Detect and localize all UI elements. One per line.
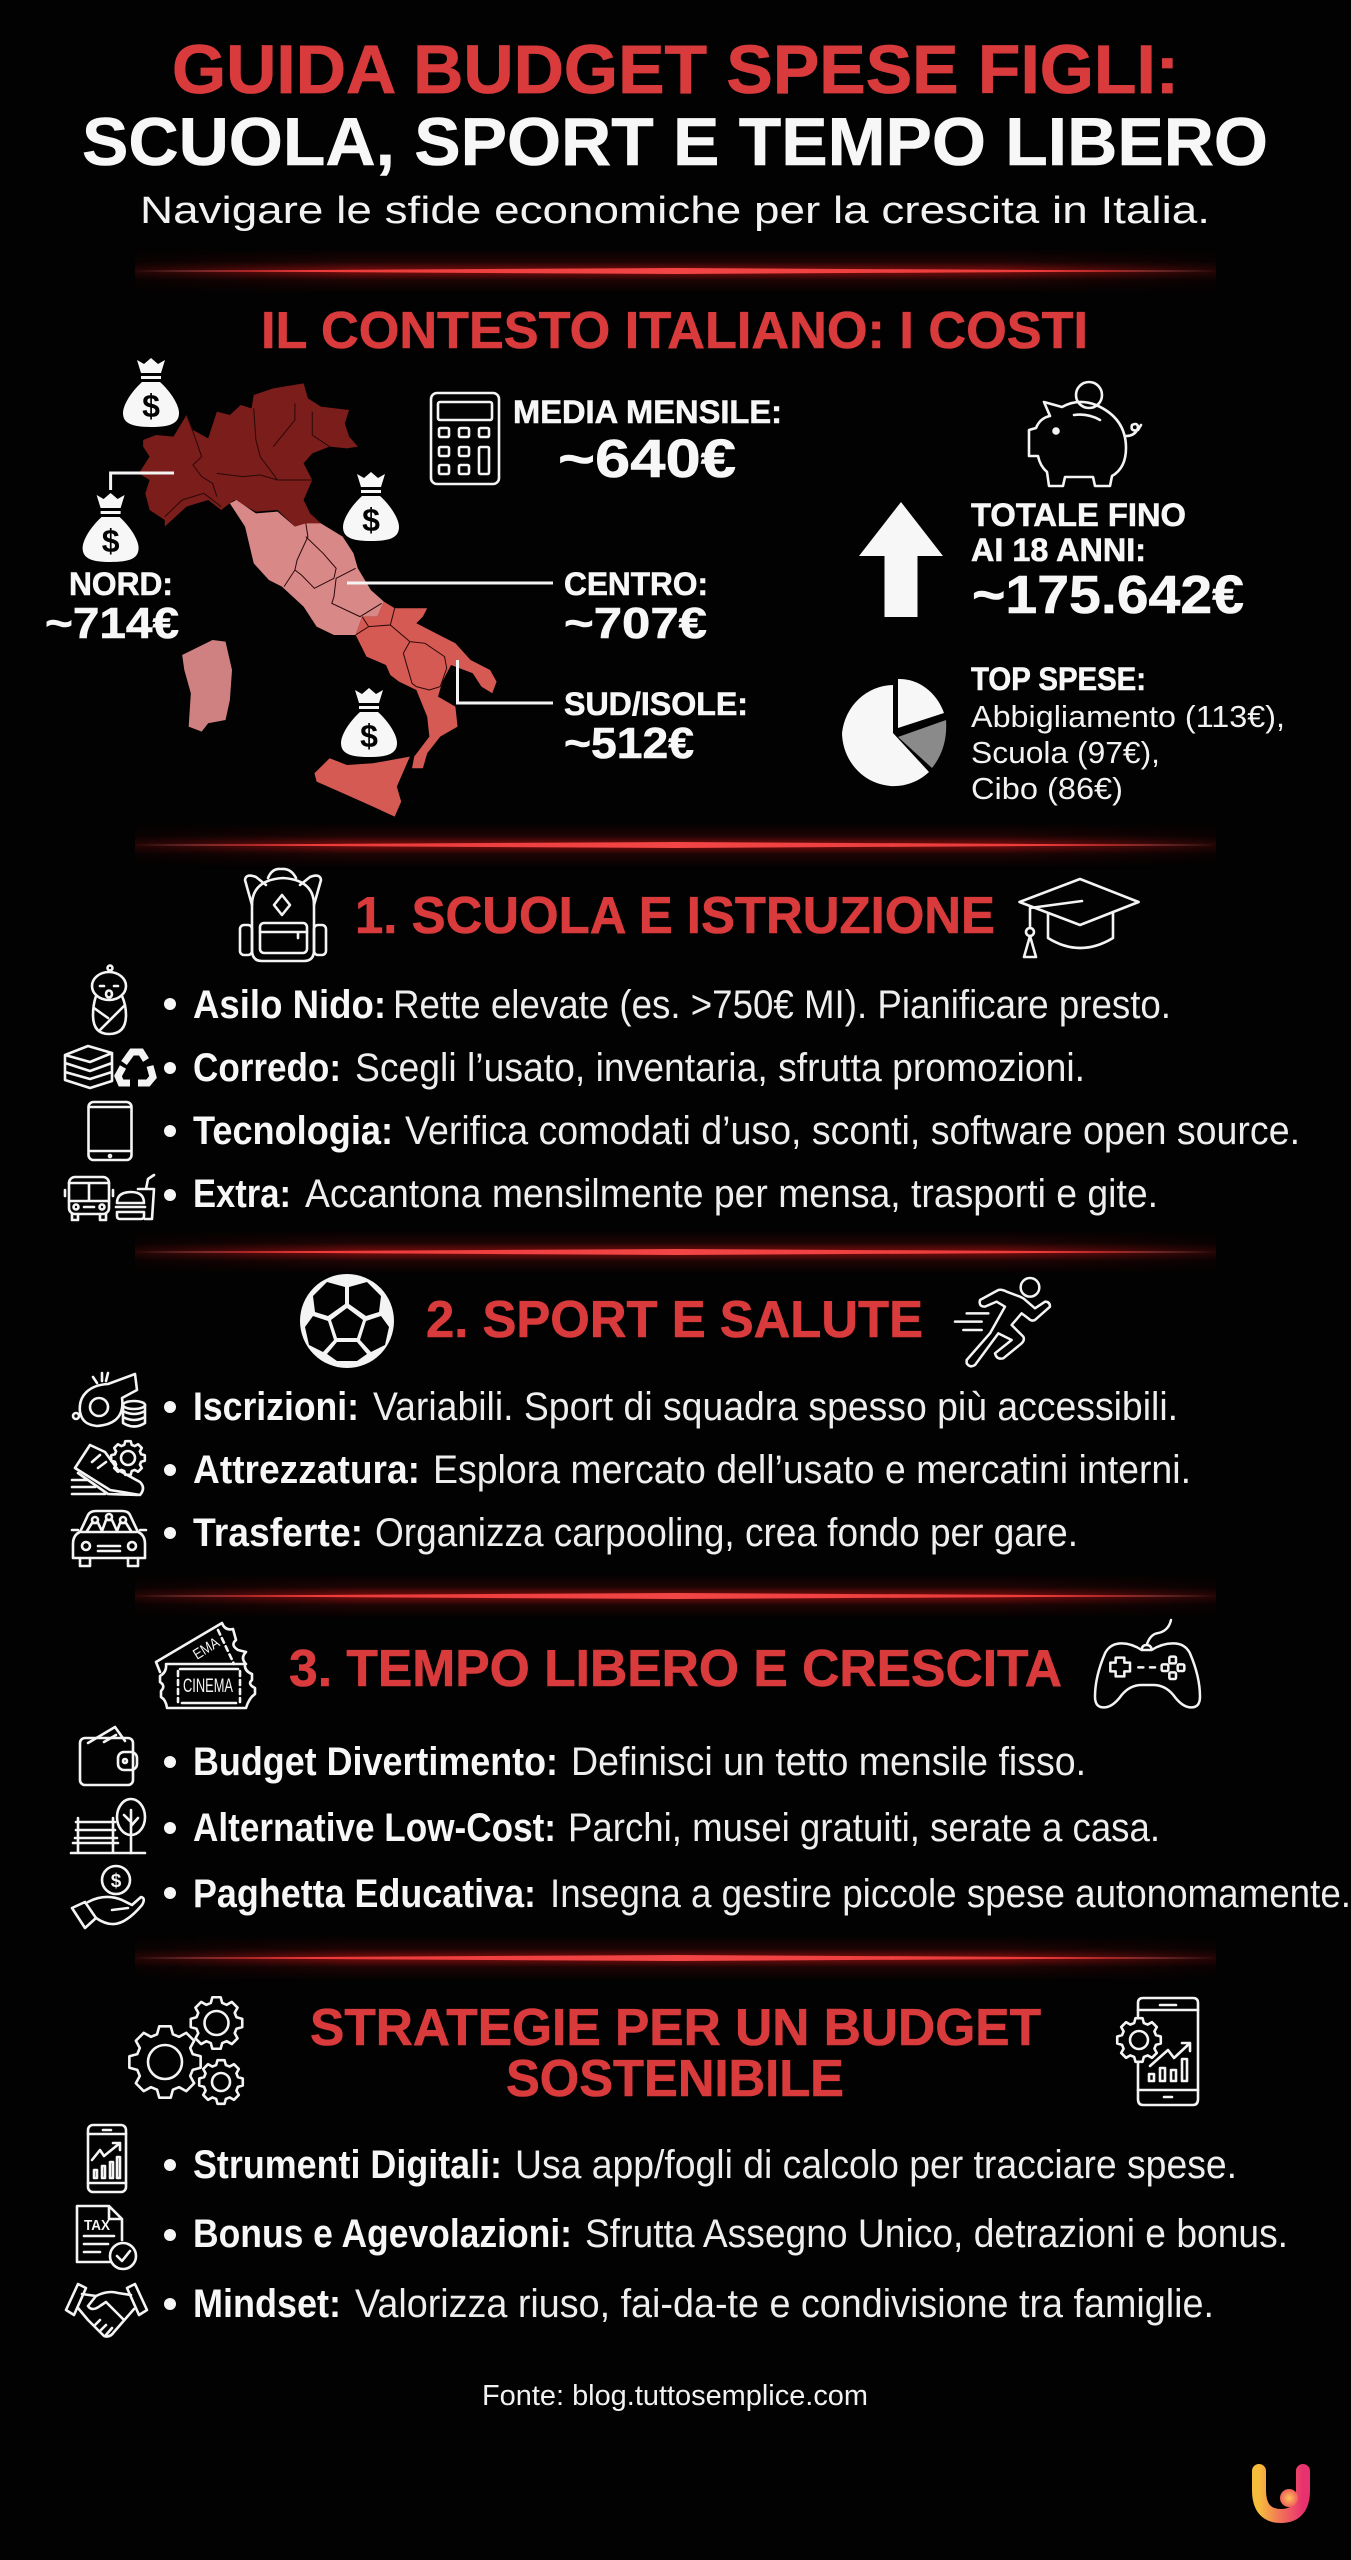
section 2 heading: sport e salute (300, 1274, 1050, 1368)
icon: runner (955, 1278, 1050, 1366)
icon: burger and drink (116, 1175, 154, 1219)
icon: graduation cap (1020, 879, 1139, 957)
north region (139, 383, 358, 527)
list: sport e salute (72, 1373, 1191, 1566)
stat: totale fino ai 18 anni: TOTALE FINO (971, 497, 1186, 533)
icon: whistle and coins (73, 1373, 145, 1426)
icon: game controller (1095, 1620, 1200, 1707)
icon: cinema tickets: CINEMA (183, 1676, 233, 1697)
heading text line 1: STRATEGIE PER UN BUDGET (310, 1999, 1041, 2057)
icon: handshake (66, 2284, 147, 2336)
stat: top spese: Abbigliamento (113€), (971, 699, 1285, 734)
icon: piggy bank (1029, 382, 1141, 486)
item: asilo nido: Asilo Nido: (193, 983, 386, 1027)
subtitle: Navigare le sfide economiche per la crescita in Italia. (140, 190, 1210, 232)
stat: totale fino ai 18 anni: AI 18 ANNI: (971, 532, 1146, 568)
stat: top spese (971, 661, 1285, 806)
heading text line 2: SOSTENIBILE (506, 2050, 844, 2108)
connector: centro (347, 582, 553, 584)
title line 1: GUIDA BUDGET SPESE FIGLI: (172, 31, 1179, 108)
label: centro: ~707€ (564, 599, 707, 648)
icon: money bag 4: $ (360, 718, 378, 754)
stat: top spese: TOP SPESE: (971, 661, 1146, 697)
icon: tax document (77, 2206, 136, 2269)
icon: calculator (431, 393, 499, 484)
item: extra: Extra: (193, 1172, 291, 1216)
item: strumenti digitali: Strumenti Digitali: (193, 2143, 502, 2187)
section 4 heading: strategie (129, 1997, 1198, 2108)
icon: money bag 2: $ (102, 523, 120, 559)
item: strumenti digitali (164, 2143, 1237, 2187)
icon: money bag 2 (83, 493, 139, 562)
icon: money bag 3: $ (362, 502, 380, 538)
item: trasferte: Organizza carpooling, crea fondo per gare. (375, 1511, 1078, 1555)
item: tecnologia: Tecnologia: (193, 1109, 393, 1153)
stat: totale fino ai 18 anni (971, 497, 1244, 625)
label: sud e isole: ~512€ (564, 719, 694, 768)
item: alternative low-cost: Parchi, musei gratuiti, serate a casa. (568, 1806, 1160, 1850)
icon: baby (92, 966, 126, 1034)
icon: tax document: TAX (84, 2217, 110, 2234)
icon: recycle (118, 1052, 153, 1083)
section 1 heading: scuola e istruzione (240, 869, 1139, 961)
icon: cinema tickets: EMA (190, 1634, 223, 1663)
label: nord: ~714€ (45, 599, 179, 648)
heading: il contesto italiano: IL CONTESTO ITALIANO: I COSTI (261, 302, 1088, 360)
logo (1259, 2471, 1303, 2516)
heading text: 1. SCUOLA E ISTRUZIONE (355, 887, 995, 945)
item: attrezzatura: Attrezzatura: (193, 1448, 420, 1492)
icon: phone with chart and gear (1117, 1998, 1198, 2105)
item: bonus e agevolazioni: Sfrutta Assegno Unico, detrazioni e bonus. (585, 2212, 1288, 2256)
item: mindset: Valorizza riuso, fai-da-te e condivisione tra famiglie. (355, 2282, 1214, 2326)
item: trasferte: Trasferte: (193, 1511, 363, 1555)
icon: money bag 1 (123, 358, 179, 427)
stat: totale fino ai 18 anni: ~175.642€ (972, 565, 1244, 625)
icon: shoe and gear (72, 1441, 145, 1495)
item: tecnologia: Verifica comodati d’uso, sconti, software open source. (405, 1109, 1300, 1153)
item: iscrizioni: Variabili. Sport di squadra spesso più accessibili. (373, 1385, 1178, 1429)
south region (356, 602, 497, 768)
icon: bench and tree (71, 1799, 145, 1853)
label: sud e isole (564, 686, 748, 768)
item: iscrizioni: Iscrizioni: (193, 1385, 359, 1429)
connector: sud (458, 660, 553, 703)
item: mindset: Mindset: (193, 2282, 341, 2326)
stat: top spese: Scuola (97€), (971, 735, 1160, 770)
title line 2: SCUOLA, SPORT E TEMPO LIBERO (82, 104, 1268, 180)
icon: up arrow (859, 502, 943, 617)
item: alternative low-cost (164, 1806, 1160, 1850)
item: strumenti digitali: Usa app/fogli di calcolo per tracciare spese. (515, 2143, 1237, 2187)
icon: gears (129, 1997, 243, 2104)
heading text: 2. SPORT E SALUTE (426, 1291, 923, 1349)
icon: soccer ball (300, 1274, 394, 1368)
sicily (314, 757, 410, 817)
stat: media mensile: MEDIA MENSILE: (513, 394, 782, 430)
source note: Fonte: blog.tuttosemplice.com (482, 2380, 868, 2412)
icon: money bag 3 (343, 472, 399, 541)
icon: tablet (88, 1102, 132, 1160)
item: attrezzatura: Esplora mercato dell’usato e mercatini interni. (433, 1448, 1191, 1492)
item: budget divertimento: Definisci un tetto mensile fisso. (571, 1740, 1086, 1784)
icon: backpack (240, 869, 326, 961)
item: budget divertimento: Budget Divertimento: (193, 1740, 558, 1784)
stat: media mensile (513, 394, 782, 489)
icon: pie chart (842, 679, 946, 786)
connector: nord (111, 473, 174, 490)
item: asilo nido: Rette elevate (es. >750€ MI). Pianificare presto. (393, 983, 1171, 1027)
heading text: 3. TEMPO LIBERO E CRESCITA (289, 1640, 1062, 1698)
icon: hand with coin (72, 1866, 144, 1928)
label: centro: CENTRO: (564, 566, 708, 602)
centre region (230, 500, 384, 635)
icon: money bag 4 (341, 688, 397, 757)
icon: wallet (80, 1727, 137, 1785)
stat: top spese: Cibo (86€) (971, 771, 1123, 806)
icon: phone with chart (88, 2125, 126, 2192)
title block (82, 31, 1268, 232)
list: tempo libero e crescita (71, 1727, 1351, 1928)
section 3 heading: tempo libero e crescita (156, 1620, 1200, 1708)
label: centro (564, 566, 708, 648)
item: paghetta educativa: Paghetta Educativa: (193, 1872, 536, 1916)
icon: money bag 1: $ (142, 388, 160, 424)
label: nord: NORD: (69, 566, 173, 602)
item: corredo: Corredo: (193, 1046, 341, 1090)
item: alternative low-cost: Alternative Low-Cost: (193, 1806, 556, 1850)
icon: cinema tickets (156, 1623, 255, 1708)
item: corredo: Scegli l’usato, inventaria, sfrutta promozioni. (355, 1046, 1085, 1090)
icon: car with passengers (72, 1511, 146, 1566)
icon: bus (65, 1177, 113, 1220)
item: extra: Accantona mensilmente per mensa, trasporti e gite. (305, 1172, 1158, 1216)
icon: hand with coin: $ (111, 1871, 122, 1892)
list: scuola e istruzione (65, 966, 1300, 1220)
icon: books (65, 1046, 112, 1088)
item: budget divertimento (164, 1740, 1086, 1784)
item: bonus e agevolazioni: Bonus e Agevolazioni: (193, 2212, 572, 2256)
map of Italy (139, 383, 497, 817)
stat: media mensile: ~640€ (558, 429, 736, 489)
sardinia (182, 640, 232, 732)
label: nord (45, 566, 179, 648)
item: bonus e agevolazioni (164, 2212, 1288, 2256)
item: paghetta educativa (164, 1872, 1351, 1916)
list: strategie (66, 2125, 1288, 2336)
label: sud e isole: SUD/ISOLE: (564, 686, 748, 722)
